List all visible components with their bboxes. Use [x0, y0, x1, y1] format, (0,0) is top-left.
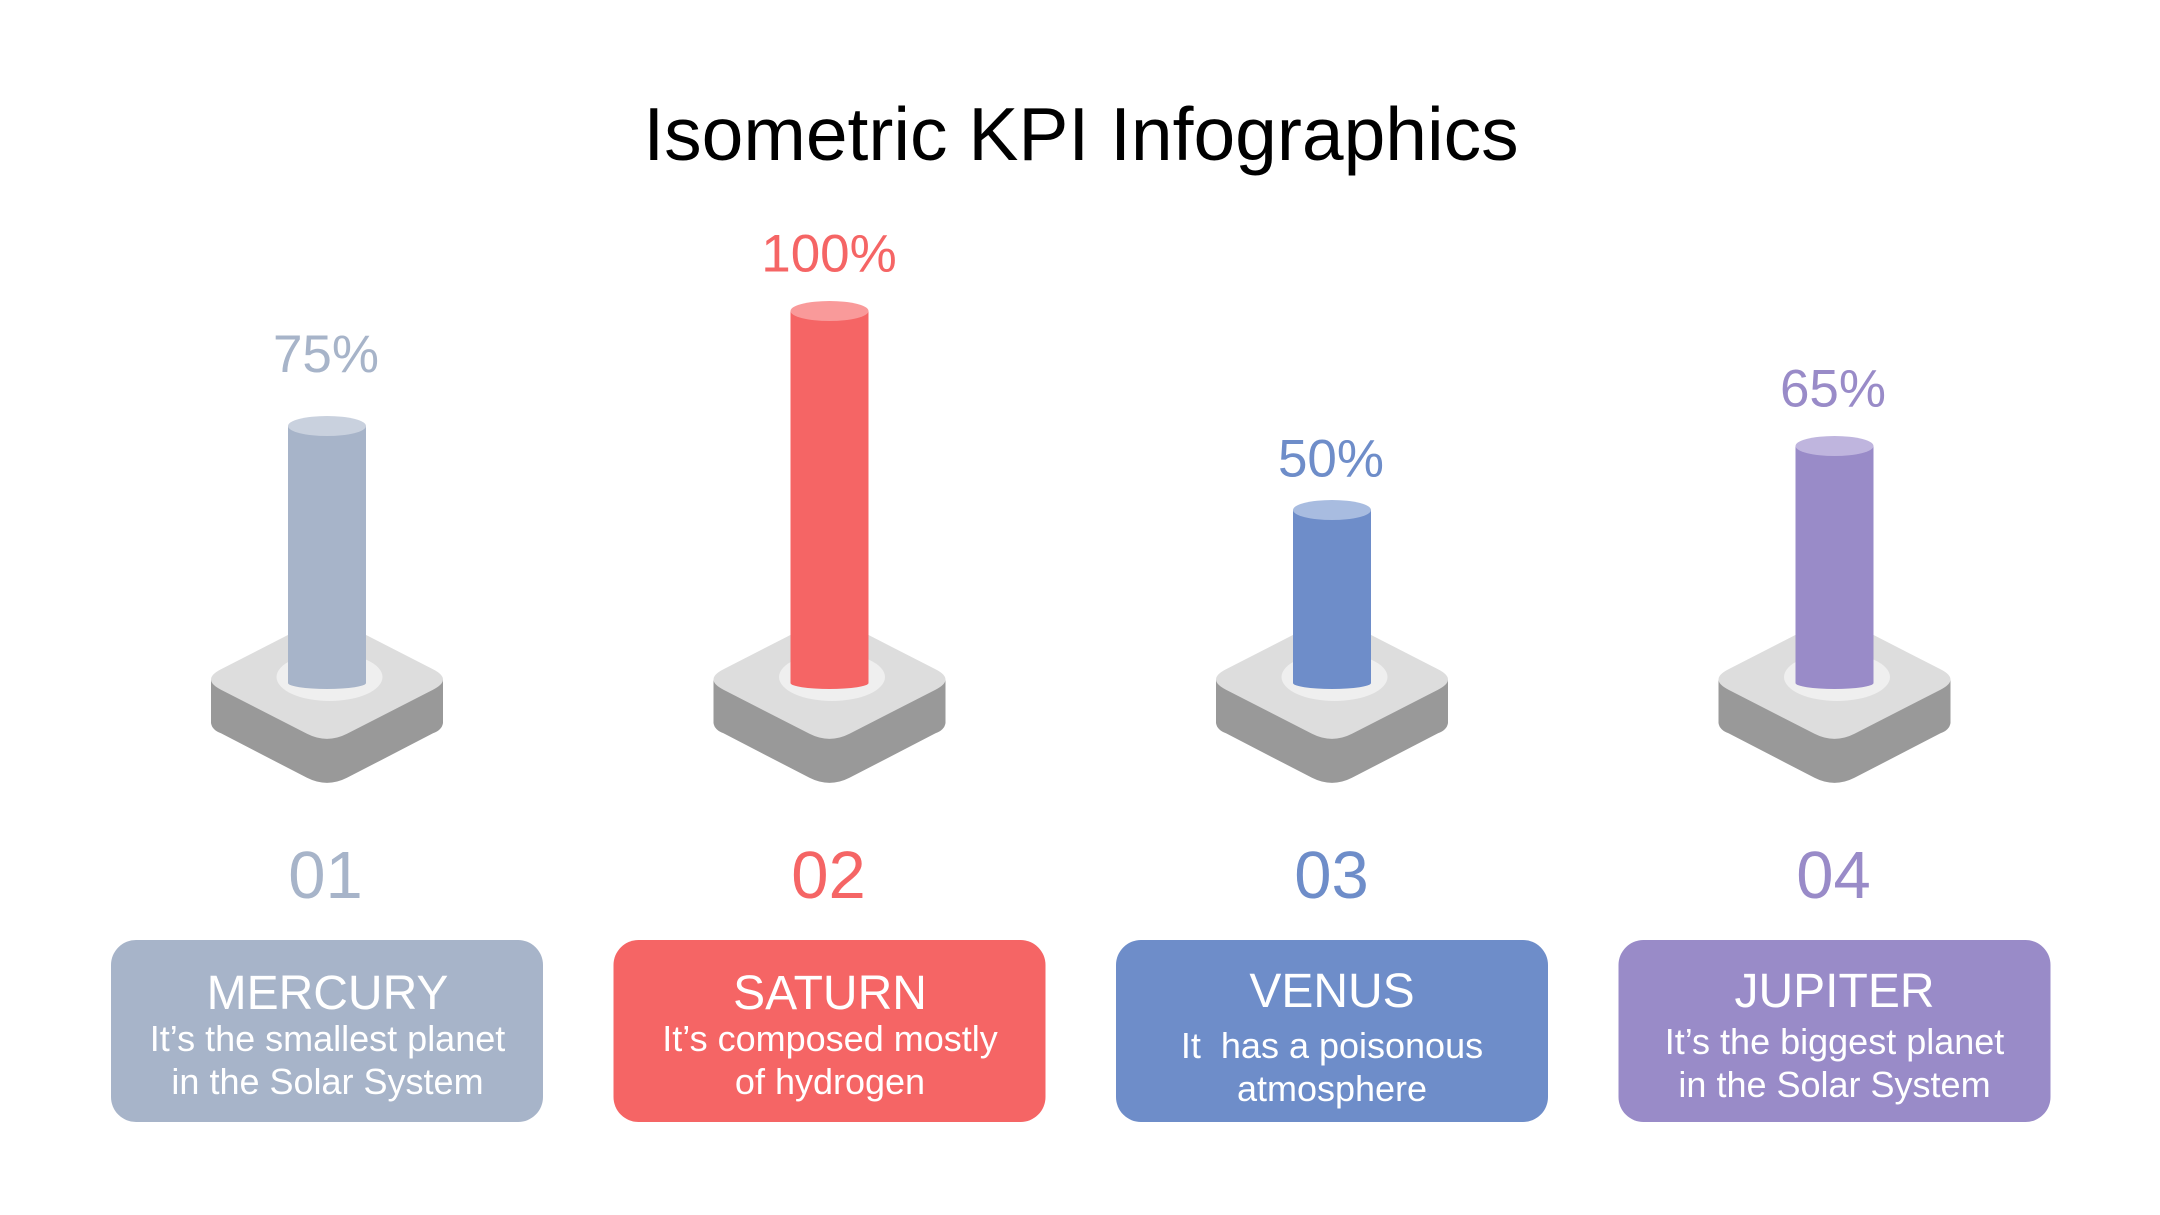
icon: isometric platform and cylinder 65% — [1718, 436, 1950, 783]
number 03: 03 — [1294, 838, 1369, 913]
icon: isometric platform and cylinder 75% — [211, 416, 443, 783]
card: Jupiter: in the Solar System — [1678, 1064, 1991, 1105]
card: Mercury: It’s the smallest planet — [150, 1018, 505, 1059]
card: Venus: It has a poisonous — [1181, 1025, 1483, 1066]
card: Saturn: It’s composed mostly — [662, 1018, 998, 1059]
number 01: 01 — [288, 838, 363, 913]
panel: Jupiter column — [1618, 360, 2050, 1122]
panel: Saturn column — [614, 224, 1046, 1122]
card: Venus — [1116, 940, 1548, 1122]
panel: Venus column — [1116, 430, 1548, 1122]
card: Saturn: of hydrogen — [735, 1061, 925, 1102]
value: 75%: 75% — [273, 325, 379, 384]
card: Venus: VENUS — [1249, 965, 1415, 1018]
card: Jupiter: It’s the biggest planet — [1665, 1021, 2004, 1062]
card: Mercury — [111, 940, 543, 1122]
value: 50%: 50% — [1278, 430, 1384, 488]
card: Mercury: MERCURY — [207, 967, 448, 1020]
value: 100%: 100% — [761, 224, 897, 284]
icon: isometric platform and cylinder 100% — [714, 301, 946, 783]
value: 65%: 65% — [1780, 360, 1886, 418]
card: Saturn: SATURN — [733, 967, 927, 1020]
card: Mercury: in the Solar System — [171, 1061, 484, 1102]
panel: Mercury column — [111, 325, 543, 1122]
card: Jupiter — [1618, 940, 2050, 1122]
title: Isometric KPI Infographics — [643, 92, 1519, 176]
card: Saturn — [614, 940, 1046, 1122]
number 04: 04 — [1796, 838, 1871, 913]
number 02: 02 — [791, 838, 866, 913]
icon: isometric platform and cylinder 50% — [1216, 500, 1448, 783]
card: Jupiter: JUPITER — [1734, 965, 1935, 1018]
card: Venus: atmosphere — [1237, 1068, 1427, 1109]
